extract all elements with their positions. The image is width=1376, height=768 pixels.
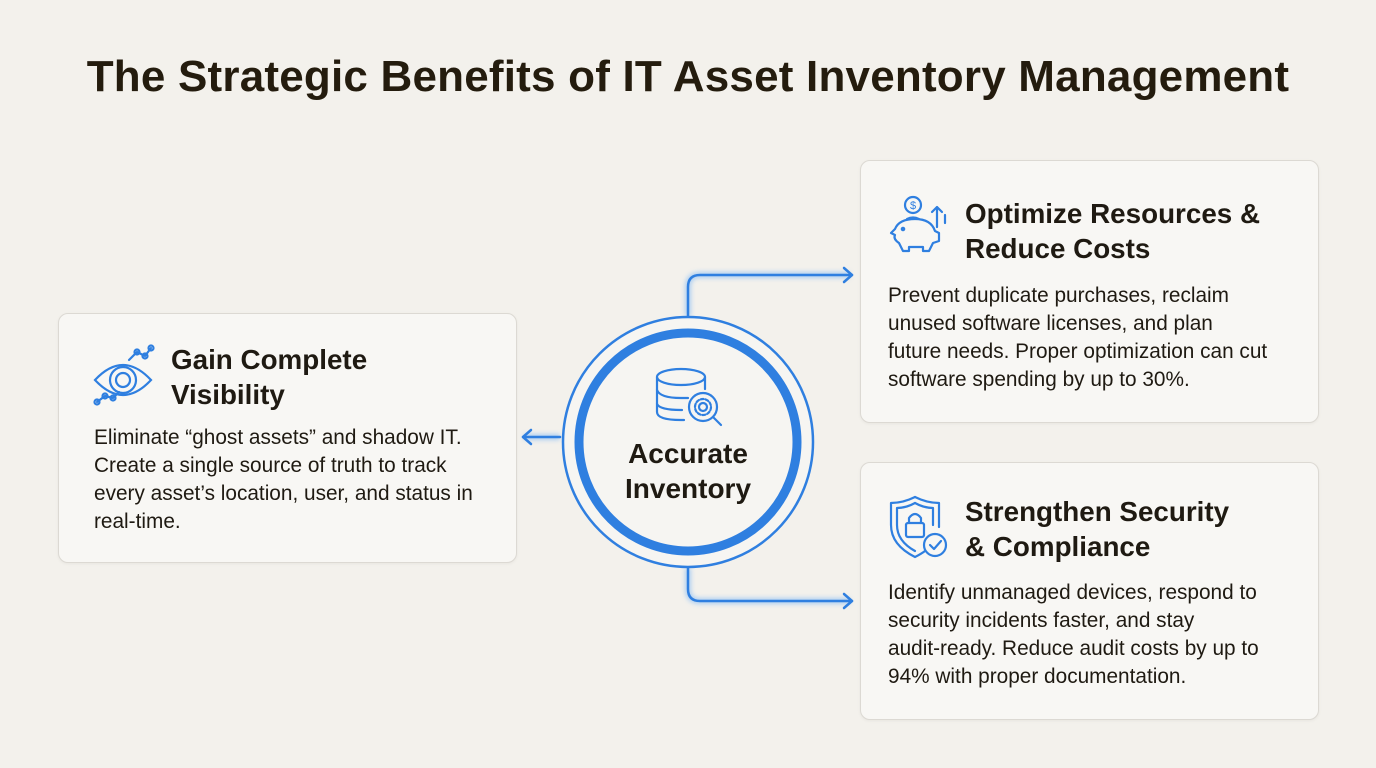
heading <box>171 344 367 410</box>
panel: Gain Complete Visibility <box>58 313 517 563</box>
icon: eye with data points <box>93 344 155 406</box>
body text: unused software licenses, and plan <box>888 312 1213 335</box>
body text: 94% with proper documentation. <box>888 665 1186 688</box>
central hub: Accurate Inventory <box>562 316 814 568</box>
heading <box>965 198 1260 264</box>
heading: Visibility <box>171 379 285 410</box>
heading: & Compliance <box>965 531 1150 562</box>
body text <box>888 284 1267 391</box>
body text: Create a single source of truth to track <box>94 454 447 477</box>
body text: real-time. <box>94 510 181 533</box>
central hub: Accurate Inventory: Accurate <box>628 438 748 469</box>
body text: audit-ready. Reduce audit costs by up to <box>888 637 1259 660</box>
body text: Prevent duplicate purchases, reclaim <box>888 284 1229 307</box>
body text: Eliminate “ghost assets” and shadow IT. <box>94 426 462 449</box>
heading: Optimize Resources & <box>965 198 1260 229</box>
body text: Identify unmanaged devices, respond to <box>888 581 1257 604</box>
body text: software spending by up to 30%. <box>888 368 1190 391</box>
heading: Reduce Costs <box>965 233 1150 264</box>
body text <box>94 426 473 533</box>
heading <box>965 496 1229 562</box>
body text: future needs. Proper optimization can cut <box>888 340 1267 363</box>
central hub: Accurate Inventory: Inventory <box>625 473 751 504</box>
icon: database search <box>657 369 721 425</box>
body text <box>888 581 1259 688</box>
panel: Strengthen Security & Compliance <box>860 462 1319 720</box>
panel: Optimize Resources & Reduce Costs <box>860 160 1319 423</box>
icon: shield with lock <box>890 496 948 558</box>
icon: piggy bank <box>890 196 946 252</box>
body text: every asset’s location, user, and status in <box>94 482 473 505</box>
icon: piggy bank: $ <box>910 200 916 212</box>
heading: Gain Complete <box>171 344 367 375</box>
title: The Strategic Benefits of IT Asset Inventory Management <box>87 52 1289 101</box>
heading: Strengthen Security <box>965 496 1229 527</box>
body text: security incidents faster, and stay <box>888 609 1194 632</box>
